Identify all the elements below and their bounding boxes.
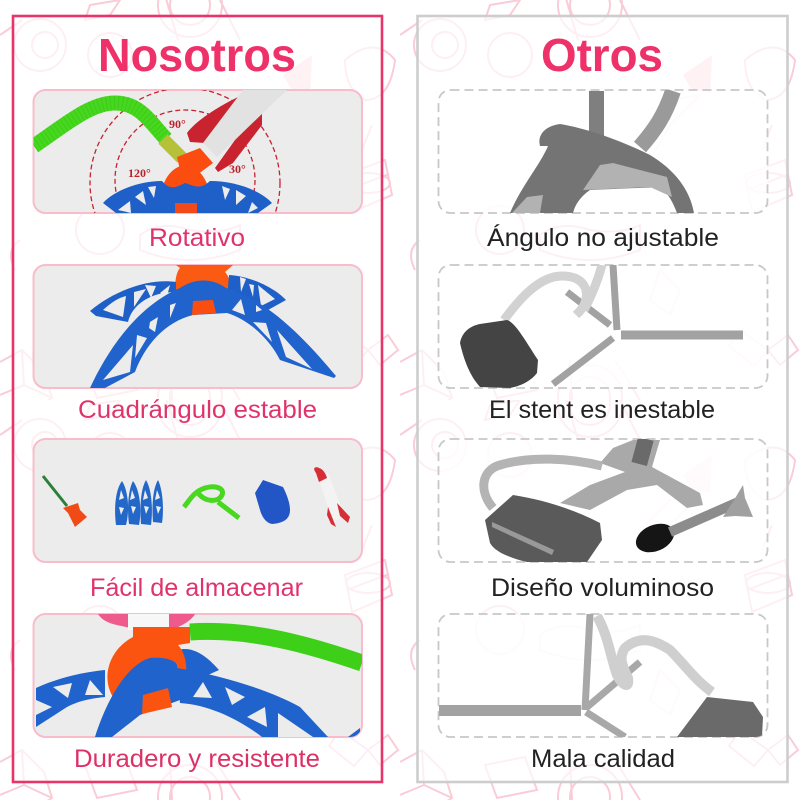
icon: blue left arch: [36, 670, 105, 727]
card: stent image: [438, 265, 768, 388]
icon: rocket tube: [203, 90, 287, 157]
icon: grey pad: [677, 697, 763, 737]
base highlights: [512, 163, 672, 213]
hose connector: [163, 139, 182, 158]
icon: blue front arch: [90, 280, 336, 388]
icon: blue pad: [255, 480, 290, 524]
icon: launcher: [560, 440, 703, 510]
label: Cuadrángulo estable: Cuadrángulo estable: [78, 396, 317, 424]
icon: rocket shaft: [670, 500, 743, 532]
card: Ángulo image: [438, 90, 768, 213]
icon: rocket fins: [187, 95, 262, 172]
icon: grey base: [510, 124, 694, 213]
icon: orange hub: [175, 265, 233, 290]
label: Diseño voluminoso: Diseño voluminoso: [491, 574, 714, 602]
label: Mala calidad: Mala calidad: [531, 745, 675, 773]
label: Duradero y resistente: Duradero y resistente: [74, 745, 320, 773]
icon: dark pad: [485, 495, 602, 562]
label: 30 degrees: 30°: [229, 162, 246, 176]
dashed angle arcs: [89, 90, 281, 213]
icon: blue shield: [95, 658, 180, 737]
icon: blue back arches: [90, 275, 286, 322]
card: Duradero image: [34, 614, 362, 737]
icon: orange clip: [142, 688, 172, 714]
icon: dark pad: [460, 320, 538, 388]
icon: green hose knot: [184, 487, 239, 518]
icon: hose: [597, 616, 712, 692]
icon: launcher pole: [631, 437, 654, 466]
icon: orange clip: [192, 300, 216, 315]
card: Cuadrángulo image: [34, 265, 362, 388]
pad highlight: [492, 522, 554, 555]
panel: Otros: [418, 16, 788, 782]
icon: long leg: [439, 705, 581, 716]
card: Fácil de almacenar image: [34, 439, 362, 562]
icon: blue right arch: [177, 668, 328, 737]
icon: orange hub: [107, 627, 190, 700]
label: El stent es inestable: El stent es inestable: [489, 396, 715, 424]
label: 120 degrees: 120°: [128, 166, 151, 180]
icon: rocket: [314, 467, 350, 527]
label: Fácil de almacenar: Fácil de almacenar: [90, 574, 303, 602]
small blue corner: [348, 728, 360, 737]
icon: rocket fins: [723, 485, 753, 517]
label: Ángulo no ajustable: Ángulo no ajustable: [487, 223, 719, 252]
icon: hose: [504, 265, 602, 320]
card: Mala calidad image: [438, 614, 768, 737]
label: 90 degrees: 90°: [169, 117, 186, 131]
icon: launcher stem: [43, 476, 87, 527]
icon: hose: [640, 91, 673, 147]
icon: rocket foam: [632, 518, 678, 558]
panel: Nosotros: [13, 16, 382, 782]
icon: stand legs: [553, 265, 743, 384]
icon: orange hub: [164, 166, 207, 188]
icon: green hose: [190, 631, 362, 663]
icon: hose: [484, 459, 602, 508]
icon: rocket bottom: [98, 614, 195, 630]
heading: Otros: Otros: [541, 29, 663, 81]
icon: stand legs: [585, 614, 640, 737]
card: Rotativo image: [32, 89, 363, 214]
label: Rotativo: Rotativo: [149, 224, 245, 252]
icon: blue back arch: [178, 649, 219, 675]
icon: green hose: [34, 103, 166, 146]
icon: blue base: [103, 181, 272, 213]
heading: Nosotros: Nosotros: [98, 29, 296, 81]
icon: pole: [589, 91, 604, 136]
icon: blue fins: [115, 480, 163, 525]
icon: orange neck: [177, 148, 213, 175]
card: Diseño image: [438, 437, 768, 562]
